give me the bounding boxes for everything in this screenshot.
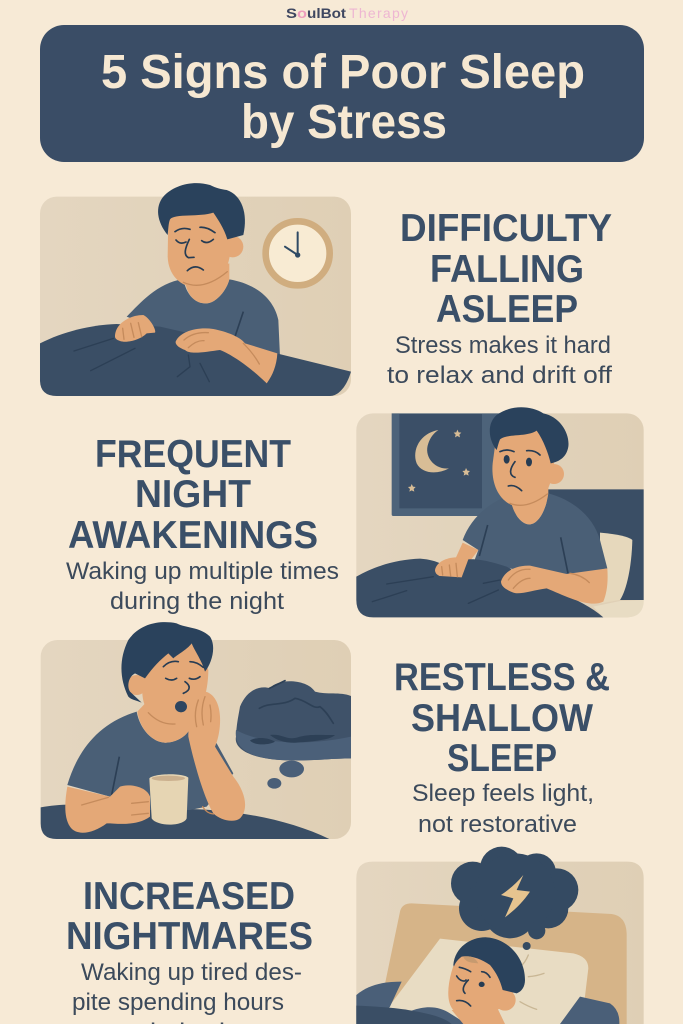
heading: Difficulty Falling Asleep: DIFFICULTY <box>400 207 612 250</box>
man yawning <box>67 622 245 821</box>
text: Difficulty Falling Asleep description: Stress makes it hard <box>395 332 611 359</box>
text: Increased Nightmares description: pite spending hours <box>72 989 284 1016</box>
heading: Restless and Shallow Sleep: RESTLESS & <box>394 656 610 699</box>
heading: Difficulty Falling Asleep: FALLING <box>430 248 584 291</box>
text: Restless and Shallow Sleep description: not restorative <box>418 811 577 838</box>
headboard and pillow <box>547 489 644 617</box>
text: Increased Nightmares description <box>72 959 302 1024</box>
window with moon and stars <box>392 413 517 516</box>
heading: Frequent Night Awakenings: NIGHT <box>135 473 251 516</box>
title banner: by Stress <box>241 96 447 149</box>
text: Frequent Night Awakenings description <box>66 558 339 615</box>
heading: Frequent Night Awakenings <box>68 433 318 557</box>
man in bed <box>127 183 280 357</box>
heading: Frequent Night Awakenings: FREQUENT <box>95 433 291 476</box>
title banner <box>40 25 644 162</box>
text: Increased Nightmares description: Waking up tired des- <box>81 959 302 986</box>
table <box>41 805 329 839</box>
panel: illustration yawning with coffee <box>41 622 351 839</box>
heading: Difficulty Falling Asleep <box>400 207 612 331</box>
heading: Increased Nightmares: NIGHTMARES <box>66 915 313 958</box>
man lying down <box>448 937 525 1024</box>
heading: Increased Nightmares <box>66 875 313 958</box>
logo: SoulBot Therapy <box>286 5 408 21</box>
heading: Restless and Shallow Sleep: SHALLOW <box>411 697 593 740</box>
logo: SoulBot Therapy: S <box>286 5 297 21</box>
text: Frequent Night Awakenings description: Waking up multiple times <box>66 558 339 585</box>
heading: Frequent Night Awakenings: AWAKENINGS <box>68 514 318 557</box>
pillow <box>377 939 588 1024</box>
heading: Restless and Shallow Sleep <box>394 656 610 780</box>
headboard <box>377 903 627 1024</box>
icon: coffee mug <box>149 774 188 825</box>
blanket <box>356 982 619 1024</box>
logo: SoulBot Therapy: o <box>297 5 307 21</box>
blanket <box>356 559 603 617</box>
heading: Restless and Shallow Sleep: SLEEP <box>447 737 557 780</box>
text: Difficulty Falling Asleep description: to relax and drift off <box>387 362 612 389</box>
text: Difficulty Falling Asleep description <box>387 332 612 389</box>
thought cloud <box>236 681 351 789</box>
panel: illustration difficulty falling asleep <box>40 183 351 396</box>
hand holding mug <box>65 785 150 833</box>
logo: SoulBot Therapy: Therapy <box>349 5 408 21</box>
heading: Difficulty Falling Asleep: ASLEEP <box>436 288 578 331</box>
panel: illustration nightmares in bed <box>356 847 644 1024</box>
hands on blanket <box>115 315 277 383</box>
man sitting up <box>453 407 607 577</box>
title banner: 5 Signs of Poor Sleep <box>101 46 585 99</box>
text: Restless and Shallow Sleep description <box>412 780 594 838</box>
text: Restless and Shallow Sleep description: Sleep feels light, <box>412 780 594 807</box>
logo: SoulBot Therapy: ulBot <box>307 5 346 21</box>
blanket <box>40 324 351 396</box>
heading: Increased Nightmares: INCREASED <box>83 875 295 918</box>
thought cloud with lightning bolt <box>451 847 578 950</box>
hands on blanket <box>435 557 608 604</box>
text: Frequent Night Awakenings description: during the night <box>110 588 284 615</box>
panel: illustration night awakening <box>356 407 644 617</box>
icon: wall clock <box>266 221 330 285</box>
